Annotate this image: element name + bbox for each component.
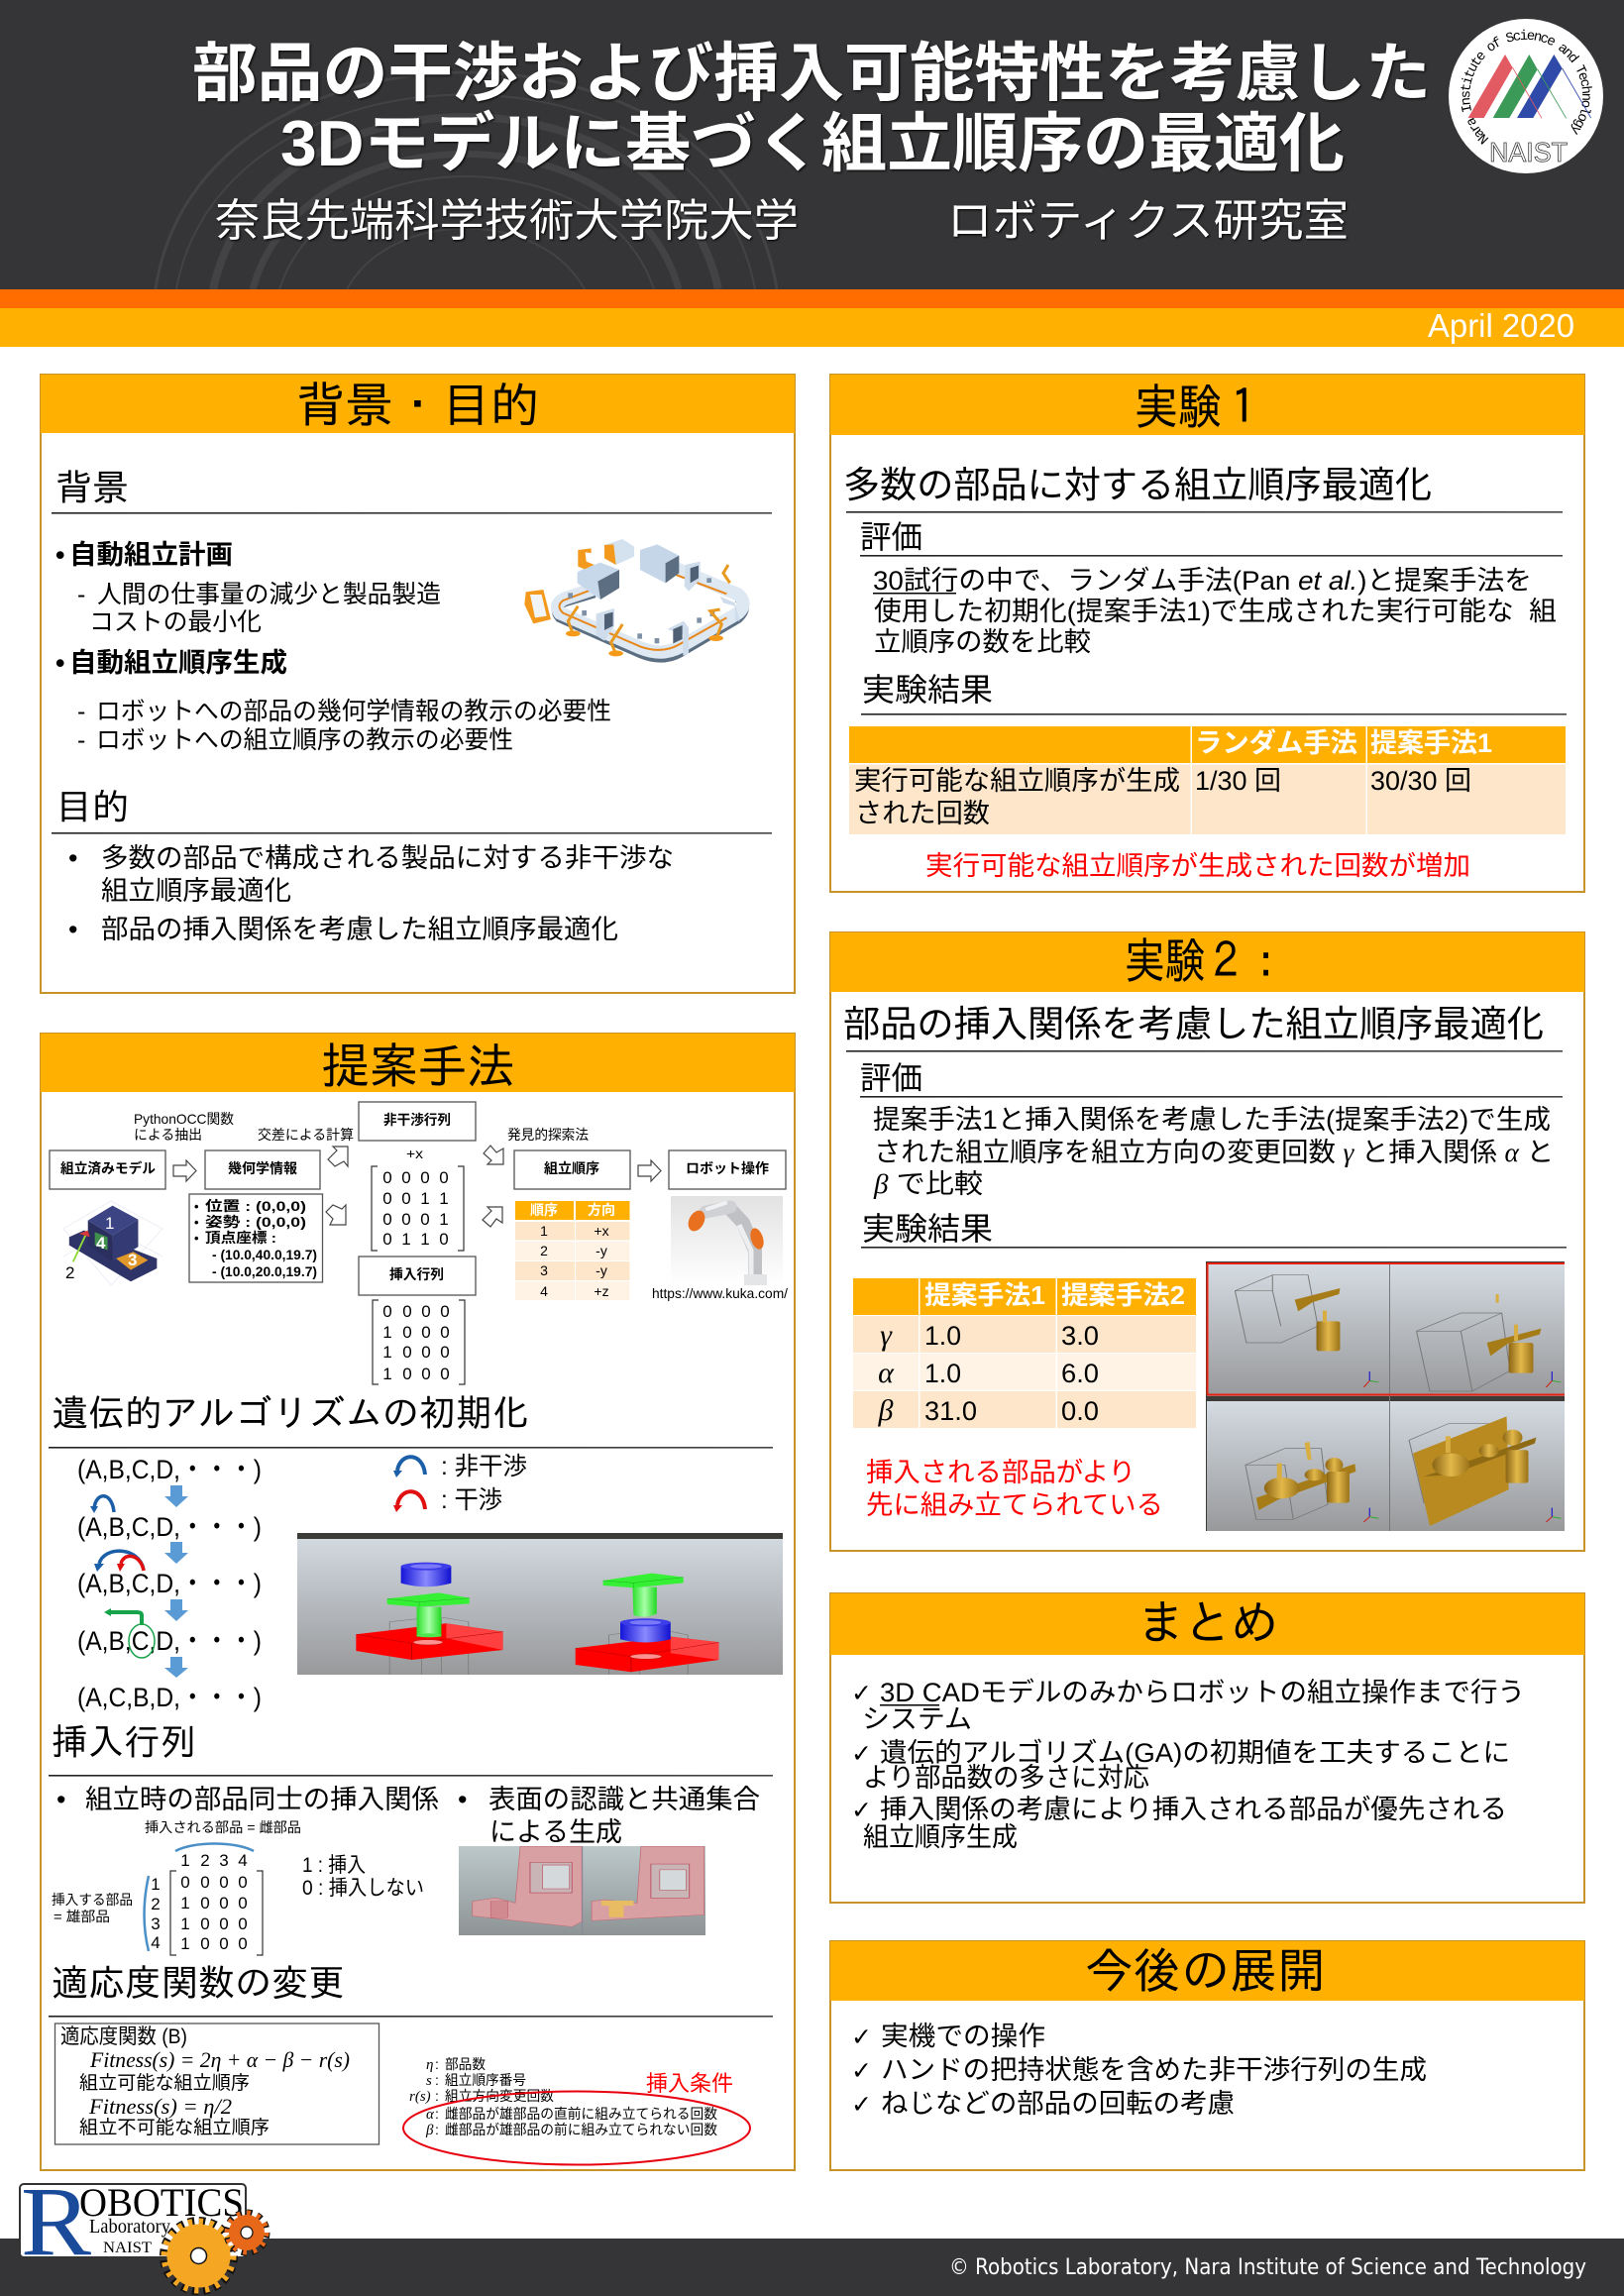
- text block: 目的の箇条書き: 部品の挿入関係を考慮した組立順序最適化: [101, 915, 618, 944]
- symbol legend: 雌部品が雄部品の前に組み立てられない回数: [445, 2122, 717, 2137]
- symbol legend: r(s): [409, 2089, 431, 2105]
- text block: 表面の認識: 表面の認識と共通集合: [488, 1785, 760, 1814]
- insertion matrix: 0: [200, 1914, 210, 1933]
- heading: 実験２: 実験２：: [1125, 935, 1286, 989]
- insertion matrix: 4: [238, 1851, 248, 1870]
- text block: 表面の認識: •: [458, 1785, 467, 1814]
- table: 組立順序: -y: [595, 1262, 607, 1278]
- symbol legend: :: [435, 2072, 439, 2088]
- fitness function box: Fitness(s) = 2η + α − β − r(s): [89, 2047, 350, 2072]
- matrix: 挿入行列: 0: [421, 1343, 431, 1362]
- table: 実験2結果: 1.0: [924, 1321, 961, 1351]
- panel: 提案手法: [41, 1034, 795, 2170]
- table: 実験2結果: 0.0: [1061, 1396, 1099, 1426]
- subheading: 実験結果: 実験結果: [862, 672, 993, 708]
- logo: NAIST: [1449, 19, 1603, 173]
- footer bar: [0, 2239, 1624, 2296]
- heading: 提案手法: 提案手法: [321, 1040, 515, 1094]
- text block: summary item 1: システム: [862, 1704, 972, 1734]
- subheading: 背景: 背景: [55, 468, 129, 508]
- image: interference simulation: [297, 1533, 783, 1675]
- text block: 自動組立順序生成: ロボットへの組立順序の教示の必要性: [96, 726, 513, 754]
- text block: 表面の認識: [458, 1785, 760, 1847]
- symbol legend: :: [435, 2088, 439, 2104]
- matrix: 非干渉行列: 0: [401, 1210, 411, 1229]
- table: 実験2結果: 3.0: [1061, 1321, 1099, 1351]
- matrix: 挿入行列: 0: [440, 1302, 450, 1321]
- title: [192, 37, 1431, 179]
- sequence diagram: (A,B,C,D,・・・): [77, 1512, 262, 1542]
- symbol legend: β: [425, 2123, 434, 2138]
- insertion matrix: 0: [200, 1894, 210, 1913]
- symbol legend: 組立順序番号: [445, 2072, 526, 2088]
- matrix: 挿入行列: 0: [382, 1302, 392, 1321]
- insertion matrix: 3: [151, 1914, 161, 1933]
- callout: 挿入条件: 挿入条件: [646, 2071, 733, 2096]
- text block: 自動組立計画: [55, 540, 441, 636]
- text block: future work: [851, 2022, 1427, 2119]
- flow diagram: 非干渉行列: [383, 1112, 451, 1128]
- sequence diagram: (A,B,C,D,・・・): [77, 1569, 262, 1598]
- subheading: 遺伝的アルゴリズムの初期化: 遺伝的アルゴリズムの初期化: [52, 1393, 529, 1434]
- matrix: 非干渉行列: 0: [439, 1230, 449, 1249]
- table: 実験2結果: [853, 1278, 1196, 1428]
- text block: summary item 2: [851, 1738, 1510, 1793]
- table: 組立順序: 順序: [530, 1202, 558, 1218]
- insertion matrix: 0: [219, 1914, 229, 1933]
- heading: まとめ: まとめ: [1137, 1597, 1278, 1651]
- flow diagram: 幾何学情報: [228, 1160, 297, 1176]
- matrix: 非干渉行列: 1: [439, 1189, 449, 1208]
- table: 実験2結果: 1.0: [924, 1359, 961, 1388]
- text block: 自動組立計画: 人間の仕事量の減少と製品製造: [97, 581, 441, 608]
- insertion matrix: 1: [180, 1894, 190, 1913]
- symbol legend: 部品数: [445, 2056, 486, 2072]
- table: 実験1結果: 30/30 回: [1370, 766, 1471, 796]
- sequence diagram: (A,B,C,D,・・・): [77, 1455, 262, 1484]
- text block: 評価内容: 立順序の数を比較: [874, 627, 1091, 657]
- insertion matrix: 0: [219, 1894, 229, 1913]
- legend: 干渉: : 非干渉: [441, 1453, 527, 1480]
- affiliation: ロボティクス研究室: [947, 195, 1349, 246]
- icon: 3D model: 2: [65, 1263, 74, 1282]
- insertion matrix: 1: [180, 1851, 190, 1870]
- panel: 実験2: [830, 932, 1584, 1551]
- matrix: 非干渉行列: 0: [420, 1210, 430, 1229]
- flow diagram: 組立済みモデル: [60, 1160, 156, 1176]
- matrix: 挿入行列: [373, 1300, 465, 1384]
- symbol legend: η: [426, 2057, 433, 2073]
- panel: 実験1: [830, 375, 1584, 892]
- text block: 目的の箇条書き: •: [68, 843, 77, 873]
- icon: small gear: [228, 2214, 266, 2251]
- text block: 目的の箇条書き: [68, 843, 674, 944]
- table: 組立順序: 方向: [588, 1202, 615, 1218]
- insertion matrix: 0: [238, 1873, 248, 1892]
- text block: 挿入関係: 組立時の部品同士の挿入関係: [85, 1785, 439, 1814]
- flow diagram: 発見的探索法: [507, 1127, 589, 1143]
- table: 実験1結果: ランダム手法: [1195, 727, 1357, 758]
- sequence diagram: (A,B,C,D,・・・): [77, 1626, 262, 1656]
- subheading: 組立順序最適化: 多数の部品に対する組立順序最適化: [843, 465, 1432, 505]
- affiliation: [215, 195, 1349, 246]
- insertion matrix: 3: [219, 1851, 229, 1870]
- affiliation: 奈良先端科学技術大学院大学: [215, 195, 799, 246]
- icon: 3D model: 1: [105, 1214, 114, 1233]
- text block: 自動組立順序生成: ロボットへの部品の幾何学情報の教示の必要性: [96, 698, 611, 725]
- table: 組立順序: +x: [594, 1223, 609, 1239]
- table: 実験1結果: 提案手法1: [1370, 728, 1492, 758]
- insertion matrix: 4: [151, 1933, 161, 1952]
- insertion matrix: 0: [219, 1934, 229, 1953]
- text block: 表面の認識: による生成: [489, 1817, 622, 1847]
- table: 実験2結果: 31.0: [924, 1396, 977, 1426]
- table: 実験1結果: 実行可能な組立順序が生成: [854, 766, 1180, 796]
- insertion matrix: 0: [200, 1934, 210, 1953]
- insertion matrix: 1: [180, 1934, 190, 1953]
- result note: 先に組み立てられている: [866, 1490, 1163, 1520]
- text block: 評価内容: β で比較: [873, 1169, 983, 1199]
- heading: 今後の展開: 今後の展開: [1085, 1945, 1326, 1999]
- flow diagram: 挿入行列: [389, 1266, 444, 1282]
- text block: 自動組立順序生成: -: [77, 698, 85, 725]
- insertion matrix: 1: [180, 1914, 190, 1933]
- text block: 幾何学情報: •: [194, 1199, 199, 1214]
- legend: 干渉: : 干渉: [441, 1486, 502, 1514]
- image: surface recognition: [459, 1846, 705, 1935]
- title: 部品の干渉および挿入可能特性を考慮した: [192, 37, 1431, 109]
- table: 組立順序: 4: [540, 1283, 548, 1299]
- result note: [866, 1458, 1163, 1520]
- sequence diagram: [77, 1455, 262, 1712]
- matrix: 挿入行列: 0: [440, 1365, 450, 1383]
- insertion matrix: 0: [238, 1934, 248, 1953]
- matrix: 非干渉行列: 0: [401, 1168, 411, 1187]
- date: April 2020: [1428, 307, 1574, 344]
- text block: 幾何学情報: •: [194, 1215, 199, 1230]
- insertion matrix: 2: [200, 1851, 210, 1870]
- subheading: 挿入関係: 部品の挿入関係を考慮した組立順序最適化: [843, 1004, 1544, 1044]
- text block: 幾何学情報: 位置 : (0,0,0): [205, 1198, 306, 1214]
- text block: 目的の箇条書き: •: [68, 915, 77, 944]
- panel: 今後の展開: [830, 1941, 1584, 2170]
- result note: 挿入される部品がより: [866, 1458, 1136, 1487]
- matrix: 非干渉行列: 0: [382, 1168, 392, 1187]
- heading: 実験１: 実験１: [1135, 382, 1265, 435]
- text block: 評価内容: 30試行の中で、ランダム手法(Pan et al.)と提案手法を: [873, 566, 1532, 596]
- insertion matrix: 0: [180, 1873, 190, 1892]
- panel: まとめ: [830, 1593, 1584, 1903]
- matrix: 非干渉行列: 0: [420, 1168, 430, 1187]
- text block: summary item 3: ✓: [851, 1796, 872, 1824]
- symbol legend: :: [435, 2106, 439, 2122]
- text block: 幾何学情報: •: [194, 1231, 199, 1246]
- logo: Robotics Laboratory: R: [21, 2166, 91, 2276]
- matrix: 挿入行列: 0: [402, 1323, 412, 1342]
- fitness function box: 組立可能な組立順序: [79, 2072, 250, 2094]
- matrix: 非干渉行列: 1: [401, 1230, 411, 1249]
- heading: 背景・目的: 背景・目的: [296, 380, 539, 433]
- icon: robot arm: [671, 1196, 783, 1285]
- header banner: [0, 0, 1624, 347]
- text block: future work: ✓: [851, 2023, 872, 2051]
- table: 組立順序: [515, 1201, 630, 1300]
- text block: 幾何学情報: 姿勢 : (0,0,0): [205, 1214, 306, 1230]
- table: 実験2結果: γ: [880, 1319, 893, 1352]
- table: 組立順序: 2: [540, 1243, 548, 1258]
- text block: future work: ✓: [851, 2090, 872, 2119]
- flow diagram: 組立順序: [544, 1160, 599, 1176]
- insertion matrix: 0 : 挿入しない: [302, 1877, 424, 1900]
- icon: 3D model: 4: [96, 1234, 106, 1253]
- table: 実験2結果: β: [878, 1394, 894, 1427]
- text block: 自動組立計画: コストの最小化: [89, 608, 262, 636]
- text block: 目的の箇条書き: 多数の部品で構成される製品に対する非干渉な: [101, 843, 674, 873]
- fitness function box: 組立不可能な組立順序: [79, 2117, 270, 2138]
- text block: 自動組立順序生成: -: [77, 726, 85, 754]
- table: 実験2結果: 6.0: [1061, 1359, 1099, 1388]
- matrix: 挿入行列: 0: [421, 1302, 431, 1321]
- subheading: 評価: 評価: [860, 1060, 922, 1096]
- table: 実験1結果: 1/30 回: [1195, 766, 1281, 796]
- matrix: 挿入行列: 0: [440, 1343, 450, 1362]
- insertion matrix: [52, 1819, 424, 1955]
- matrix: 非干渉行列: 0: [382, 1230, 392, 1249]
- text block: summary item 1: ✓: [851, 1679, 872, 1707]
- matrix: 挿入行列: 0: [402, 1365, 412, 1383]
- text block: summary item 2: ✓: [851, 1739, 872, 1768]
- insertion matrix: 0: [219, 1873, 229, 1892]
- matrix: 非干渉行列: 1: [420, 1189, 430, 1208]
- table: 実験2結果: α: [878, 1357, 895, 1389]
- subheading: 適応度関数の変更: 適応度関数の変更: [52, 1963, 345, 2004]
- insertion matrix: 0: [238, 1914, 248, 1933]
- symbol legend: 雌部品が雄部品の直前に組み立てられる回数: [445, 2106, 717, 2122]
- text block: future work: 実機での操作: [881, 2022, 1045, 2051]
- matrix: 非干渉行列: 1: [420, 1230, 430, 1249]
- symbol legend: s: [426, 2073, 432, 2089]
- matrix: 挿入行列: 1: [382, 1323, 392, 1342]
- text block: 評価内容: された組立順序を組立方向の変更回数 γ と挿入関係 α と: [874, 1138, 1554, 1167]
- table: 組立順序: 1: [540, 1223, 548, 1239]
- table: 組立順序: -y: [595, 1243, 607, 1258]
- text block: 自動組立順序生成: [55, 648, 611, 754]
- insertion matrix: 1 : 挿入: [302, 1854, 366, 1877]
- text block: summary item 3: 挿入関係の考慮により挿入される部品が優先される: [880, 1795, 1507, 1824]
- text block: future work: ハンドの把持状態を含めた非干渉行列の生成: [881, 2055, 1427, 2085]
- icon: large gear: [166, 2224, 232, 2289]
- matrix: 挿入行列: 0: [402, 1343, 412, 1362]
- table: 実験1結果: [849, 726, 1566, 834]
- flow diagram: [50, 1102, 788, 1384]
- matrix: 非干渉行列: [372, 1166, 464, 1251]
- result note: 実行可能な組立順序が生成された回数が増加: [925, 851, 1470, 881]
- logo: Robotics Laboratory: Laboratory: [89, 2216, 170, 2238]
- legend: 干渉: [393, 1453, 527, 1514]
- url label: https://www.kuka.com/: [652, 1285, 788, 1301]
- flow diagram: による抽出: [134, 1127, 202, 1143]
- icon: assembly line: [524, 539, 744, 658]
- text block: 幾何学情報: 頂点座標 :: [205, 1230, 276, 1246]
- symbol legend: α: [426, 2107, 435, 2123]
- text block: 評価内容: 提案手法1と挿入関係を考慮した手法(提案手法2)で生成: [873, 1105, 1551, 1135]
- matrix: 挿入行列: 1: [382, 1343, 392, 1362]
- table: 組立順序: +z: [594, 1283, 609, 1299]
- text block: 自動組立計画: 自動組立計画: [69, 540, 233, 570]
- table: 実験2結果: 提案手法1: [924, 1280, 1045, 1310]
- text block: 評価内容: [873, 1105, 1554, 1199]
- text block: future work: ねじなどの部品の回転の考慮: [881, 2089, 1235, 2119]
- text block: summary item 2: 遺伝的アルゴリズム(GA)の初期値を工夫することに: [880, 1738, 1510, 1768]
- icon: 3D model: 3: [128, 1251, 137, 1269]
- text block: 評価内容: [873, 566, 1557, 657]
- text block: 自動組立計画: •: [55, 540, 64, 570]
- logo: NAIST: Nara Institute of Science and Technology: [1461, 30, 1592, 145]
- insertion matrix: = 雄部品: [54, 1909, 110, 1924]
- text block: 挿入関係: •: [56, 1785, 65, 1814]
- matrix: 挿入行列: 1: [382, 1365, 392, 1383]
- symbol legend: :: [435, 2122, 439, 2137]
- symbol legend: :: [435, 2056, 439, 2072]
- text block: summary item 2: より部品数の多さに対応: [863, 1763, 1149, 1793]
- text block: 自動組立順序生成: 自動組立順序生成: [69, 648, 287, 678]
- fitness function box: [55, 2023, 379, 2144]
- panel: 背景・目的: [41, 375, 795, 993]
- flow diagram: ロボット操作: [686, 1160, 769, 1176]
- subheading: 実験結果: 実験結果: [862, 1211, 993, 1247]
- text block: future work: ✓: [851, 2056, 872, 2085]
- flow diagram: PythonOCC関数: [134, 1111, 234, 1127]
- text block: 自動組立順序生成: •: [55, 648, 64, 678]
- matrix: 挿入行列: 0: [440, 1323, 450, 1342]
- matrix: 挿入行列: 0: [402, 1302, 412, 1321]
- flow diagram: 交差による計算: [258, 1127, 354, 1143]
- insertion matrix: 挿入する部品: [52, 1892, 133, 1908]
- symbol legend: [409, 2056, 717, 2138]
- insertion matrix: 2: [151, 1895, 161, 1913]
- title: 3Dモデルに基づく組立順序の最適化: [280, 107, 1345, 179]
- table: 実験1結果: された回数: [855, 799, 990, 828]
- table: 実験2結果: 提案手法2: [1061, 1280, 1185, 1310]
- insertion matrix: 0: [200, 1873, 210, 1892]
- matrix: 非干渉行列: 1: [439, 1210, 449, 1229]
- subheading: 挿入行列: 挿入行列: [52, 1722, 196, 1763]
- matrix: 非干渉行列: 0: [401, 1189, 411, 1208]
- logo: NAIST: NAIST: [1489, 137, 1568, 167]
- fitness function box: 適応度関数 (B): [60, 2025, 187, 2048]
- text block: summary item 3: [851, 1795, 1507, 1852]
- callout: 挿入条件: [403, 2071, 750, 2164]
- icon: 3D model: [63, 1201, 162, 1285]
- logo: Robotics Laboratory: NAIST: [103, 2240, 152, 2256]
- fitness function box: Fitness(s) = η/2: [88, 2094, 232, 2119]
- logo: Robotics Laboratory: [20, 2166, 266, 2289]
- matrix: 非干渉行列: 0: [382, 1210, 392, 1229]
- sequence diagram: (A,C,B,D,・・・): [77, 1683, 262, 1712]
- text block: 評価内容: 使用した初期化(提案手法1)で生成された実行可能な 組: [874, 597, 1557, 626]
- subheading: 目的: 目的: [55, 787, 129, 827]
- image: assembly sequence: [1206, 1261, 1565, 1531]
- matrix: 挿入行列: 0: [421, 1365, 431, 1383]
- subheading: 評価: 評価: [860, 519, 922, 555]
- text block: 自動組立計画: -: [77, 581, 85, 608]
- matrix: 挿入行列: 0: [421, 1323, 431, 1342]
- flow diagram: +x: [406, 1146, 423, 1161]
- text block: summary item 1: 3D CADモデルのみからロボットの組立操作まで行う: [880, 1678, 1525, 1707]
- text block: 目的の箇条書き: 組立順序最適化: [101, 876, 291, 906]
- symbol legend: 組立方向変更回数: [445, 2088, 554, 2104]
- insertion matrix: 1: [151, 1875, 161, 1894]
- table: 組立順序: 3: [540, 1262, 548, 1278]
- matrix: 非干渉行列: 0: [382, 1189, 392, 1208]
- text block: 幾何学情報: - (10.0,20.0,19.7): [212, 1263, 317, 1279]
- text block: 幾何学情報: - (10.0,40.0,19.7): [212, 1247, 317, 1262]
- logo: Robotics Laboratory: OBOTICS: [79, 2180, 244, 2225]
- text block: summary item 3: 組立順序生成: [863, 1822, 1018, 1852]
- insertion matrix: 0: [238, 1894, 248, 1913]
- text block: summary item 1: [851, 1678, 1525, 1734]
- insertion matrix: 挿入される部品 = 雌部品: [145, 1819, 301, 1835]
- matrix: 非干渉行列: 0: [439, 1168, 449, 1187]
- text block: 幾何学情報: [194, 1198, 317, 1279]
